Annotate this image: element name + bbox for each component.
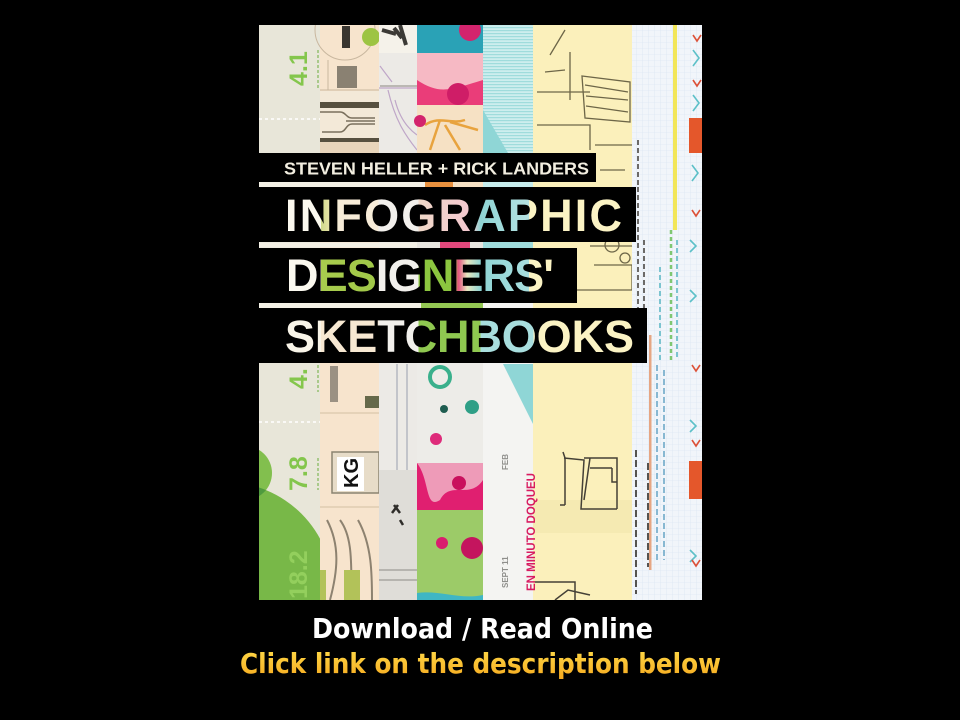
metric value 7.8: 7.8 — [285, 456, 313, 491]
column 3: pale grey sketch strip — [379, 25, 417, 600]
metric value 18.2: 18.2 — [285, 550, 313, 599]
page canvas — [241, 25, 720, 679]
title bar: Sketchbooks — [259, 308, 647, 363]
pale strips between title bars — [259, 184, 425, 306]
column 2: peach diagrams strip — [315, 0, 380, 600]
author names: STEVEN HELLER + RICK LANDERS — [284, 158, 589, 178]
click link caption: Click link on the description below — [240, 647, 721, 680]
label KG: KG — [341, 458, 363, 488]
vertical pink label fragment: EN MINUTO DOQUEU — [524, 473, 538, 591]
metric value 4.: 4. — [285, 368, 313, 389]
download caption: Download / Read Online — [312, 612, 653, 645]
column 1: beige metrics strip — [259, 25, 320, 600]
title word: INFOGRAPHIC: INFOGRAPHIC — [285, 190, 622, 241]
author bar — [259, 153, 596, 182]
title word: DESIGNERS': DESIGNERS' — [286, 250, 554, 301]
date label SEPT 11: SEPT 11 — [501, 556, 510, 588]
column 4: pink and green map strip — [414, 19, 483, 600]
title bar: Designers' — [259, 248, 577, 303]
title word: SKETCHBOOKS: SKETCHBOOKS — [285, 311, 634, 362]
column 7: grid paper with handwriting — [632, 25, 702, 600]
month label FEB: FEB — [501, 454, 510, 470]
title bar: Infographic — [259, 187, 636, 242]
column 6: yellow sticky-note sketches — [533, 25, 632, 600]
book cover — [259, 25, 702, 600]
metric value 4.1: 4.1 — [285, 51, 313, 86]
column 5: aqua lines and white strip — [483, 25, 533, 600]
